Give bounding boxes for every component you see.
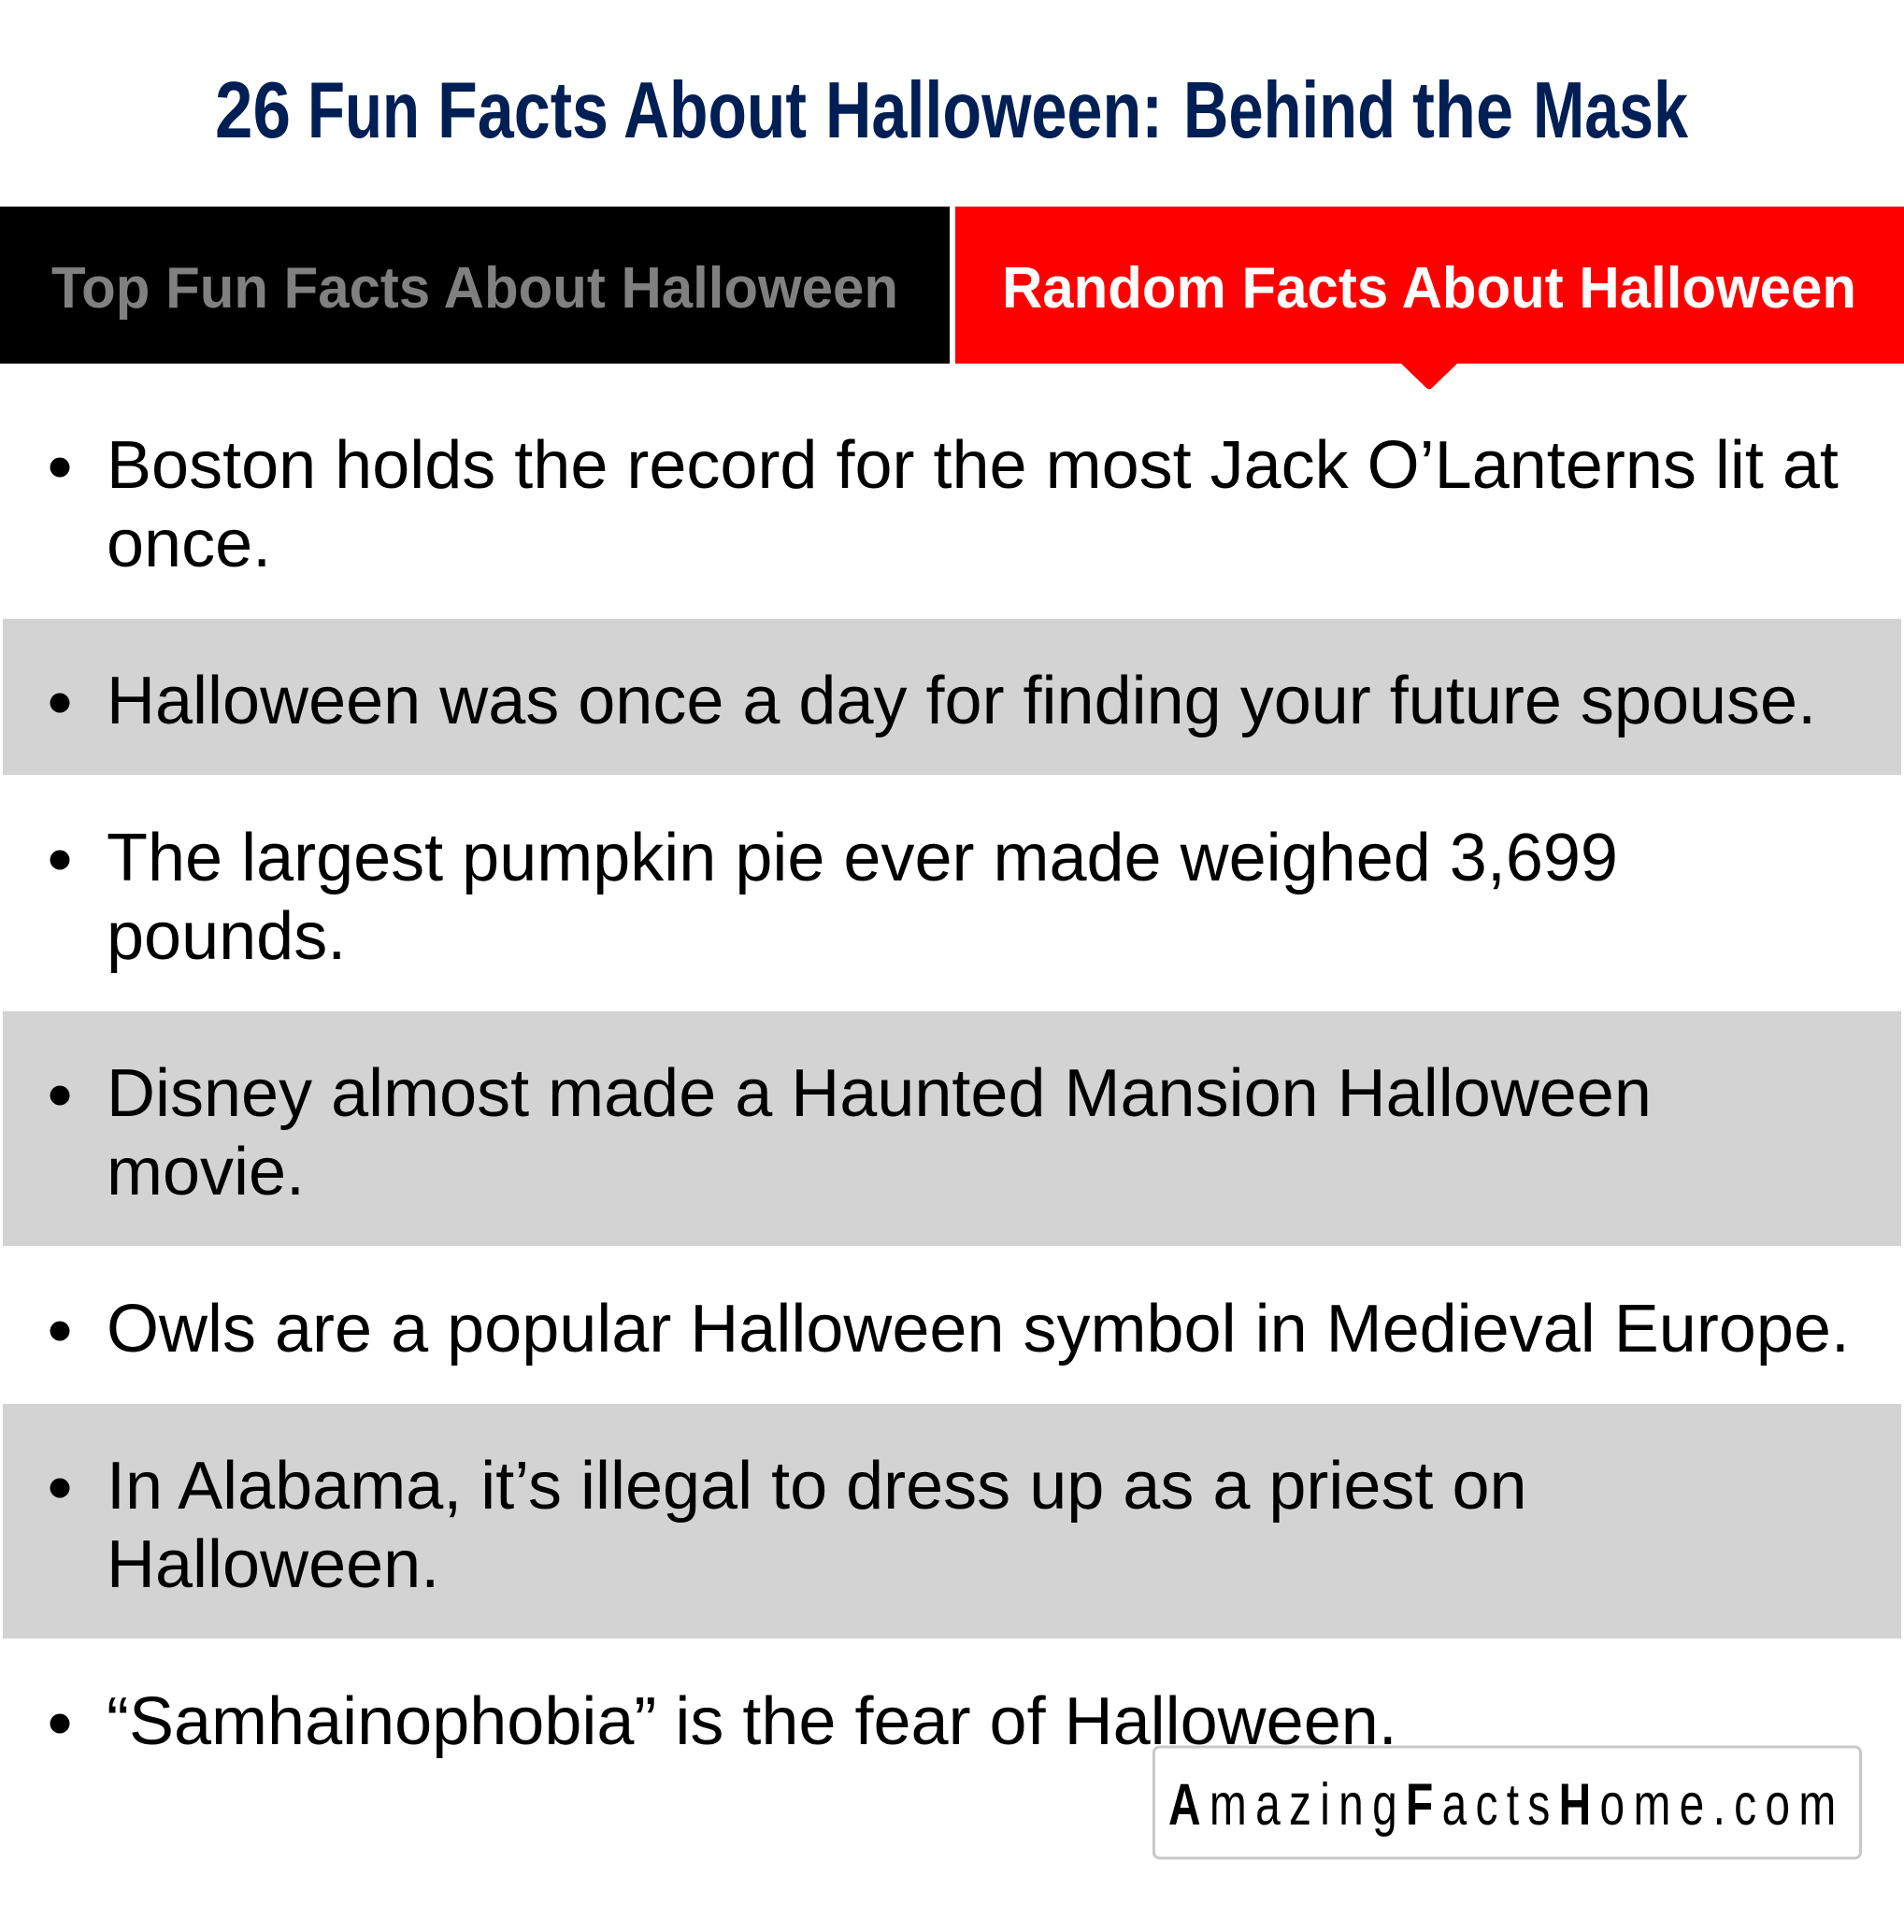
fact: pumpkin pie [50,821,1618,974]
title: Facts [437,66,608,155]
fact band: future spouse: Halloween was once a day for finding your future spouse. [107,664,1816,738]
title: the [1412,66,1513,155]
title: Halloween: [825,66,1163,155]
fact band: Alabama [3,1404,1901,1639]
watermark: AmazingFactsHome.com [1153,1747,1860,1858]
fact: owls: Owls are a popular Halloween symbol in Medieval Europe. [107,1292,1850,1367]
watermark: AmazingFactsHome.com: AmazingFactsHome.com [1168,1771,1845,1838]
fact: Boston [50,428,1839,581]
tab: top fun facts: Top Fun Facts About Halloween [51,256,898,321]
fact band: Alabama: Halloween. [107,1527,439,1602]
tab: random facts (active) [955,207,1904,389]
tab: top fun facts [0,207,950,364]
title: Fun [308,66,420,155]
fact: Boston: once. [107,507,271,581]
fact band: Alabama: In Alabama, it’s illegal to dress up as a priest on [107,1449,1527,1524]
fact band: Disney: Disney almost made a Haunted Mansion Halloween [107,1056,1652,1131]
fact band: Disney [3,1011,1901,1246]
title: Behind [1183,66,1396,155]
tab: random facts (active): Random Facts About Halloween [1002,256,1856,321]
fact: Boston: Boston holds the record for the most Jack O’Lanterns lit at [107,428,1839,503]
fact band: future spouse [3,619,1901,775]
fact: pumpkin pie: The largest pumpkin pie ever made weighed 3,699 [107,821,1618,895]
title: Mask [1533,66,1689,155]
title: 26 [215,66,291,155]
fact: Samhainophobia: “Samhainophobia” is the fear of Halloween. [107,1684,1397,1759]
title [215,66,1689,155]
fact: pumpkin pie: pounds. [107,899,346,974]
fact band: Disney: movie. [107,1135,305,1209]
title: About [623,66,807,155]
